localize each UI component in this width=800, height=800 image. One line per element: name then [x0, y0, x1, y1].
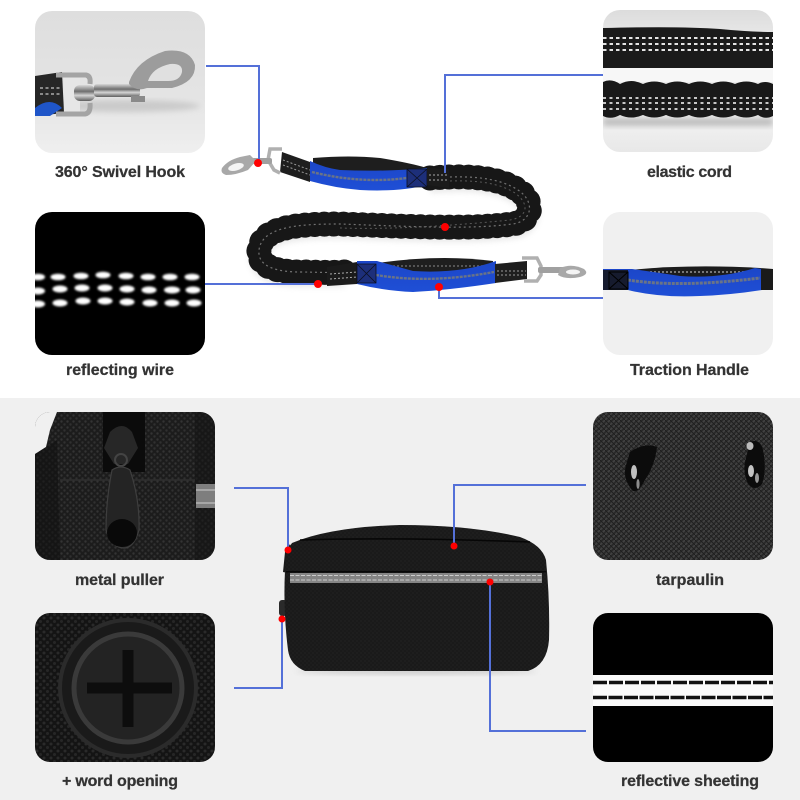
connector: reflective sheeting: [490, 582, 586, 731]
pouch body: [284, 525, 549, 671]
marker: metal puller: [284, 546, 292, 554]
marker: tarpaulin: [450, 542, 458, 550]
panel: traction handle: [603, 212, 773, 355]
label: word opening: + word opening: [62, 773, 178, 790]
side button: [279, 600, 287, 616]
label: reflective sheeting: reflective sheeting: [621, 773, 759, 790]
connector: reflecting wire: [205, 283, 318, 285]
connector: metal puller: [234, 488, 288, 550]
panel: elastic cord: [603, 10, 773, 152]
reflective strip: [286, 571, 546, 583]
panel: word opening button: [35, 613, 215, 762]
connector: word opening: [234, 619, 282, 688]
marker: traction handle: [435, 283, 443, 291]
top handle: [280, 152, 449, 190]
bottom hook: [522, 258, 586, 281]
panel: 360 swivel hook: [35, 11, 205, 153]
label: reflecting wire: reflecting wire: [66, 362, 174, 379]
marker: elastic cord: [441, 223, 449, 231]
label: elastic cord: elastic cord: [647, 164, 732, 181]
leash product: [222, 149, 586, 292]
label: tarpaulin: tarpaulin: [656, 572, 724, 589]
marker: word opening: [278, 616, 286, 622]
label: traction handle: Traction Handle: [630, 362, 749, 379]
connector: swivel hook: [206, 66, 259, 163]
marker: reflecting wire: [314, 280, 322, 288]
zipper seam: [300, 539, 530, 542]
white upper background: [0, 0, 800, 398]
connector: tarpaulin: [454, 485, 586, 546]
label: 360 swivel hook: 360° Swivel Hook: [55, 164, 185, 181]
panel: metal puller: [35, 412, 215, 560]
connector: elastic cord: [445, 75, 603, 173]
panel: tarpaulin: [593, 412, 773, 560]
zipper puller: [283, 544, 292, 573]
connector: traction handle: [439, 287, 603, 298]
panel: reflecting wire: [31, 212, 205, 355]
pouch shadow: [296, 668, 536, 674]
pouch product: [279, 525, 549, 674]
grey lower background: [0, 398, 800, 800]
panel: reflective sheeting: [593, 613, 773, 762]
top hook: [222, 149, 282, 175]
marker: swivel hook: [254, 159, 262, 167]
elastic cord section: [259, 177, 529, 277]
marker: reflective sheeting: [486, 578, 494, 586]
label: metal puller: metal puller: [75, 572, 164, 589]
bottom handle: [327, 258, 527, 292]
